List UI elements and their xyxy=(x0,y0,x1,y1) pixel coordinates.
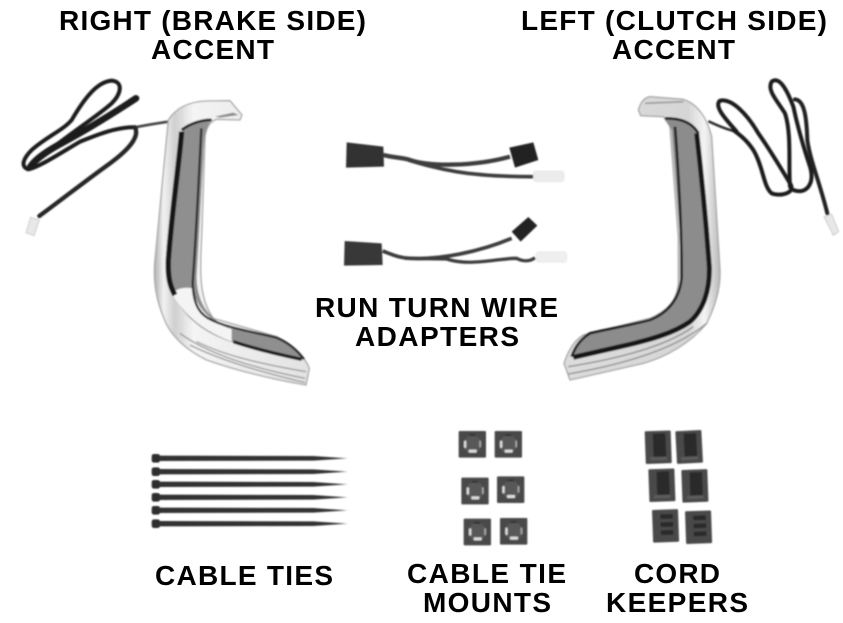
title: right brake side accent: RIGHT (BRAKE SIDE) xyxy=(59,5,366,36)
wire: right accent xyxy=(24,81,168,216)
title: right brake side accent: ACCENT xyxy=(151,34,274,65)
lens dark edge xyxy=(573,133,709,357)
cord keepers xyxy=(645,430,712,544)
chrome body xyxy=(154,101,309,385)
connector: right accent wire xyxy=(26,217,39,236)
caption: run turn wire adapters: RUN TURN WIRE xyxy=(315,292,558,323)
title: left clutch side accent xyxy=(521,5,827,65)
run turn wire adapters xyxy=(344,142,567,266)
cable ties xyxy=(152,454,347,528)
adapter: bottom xyxy=(344,217,567,266)
ribbed lower edge xyxy=(568,323,707,374)
connector: left accent wire xyxy=(824,214,839,235)
caption: cable tie mounts xyxy=(407,558,566,618)
lens panel xyxy=(573,118,711,357)
chrome body xyxy=(564,97,720,380)
right accent with wire xyxy=(24,81,309,385)
wire: left accent xyxy=(709,80,827,213)
title: left clutch side accent: LEFT (CLUTCH SIDE) xyxy=(521,5,827,36)
caption: cable ties: CABLE TIES xyxy=(155,560,333,591)
lens dark edge xyxy=(168,132,182,295)
ribbed lower edge xyxy=(180,333,306,383)
chrome highlight at bend xyxy=(172,288,232,342)
caption: run turn wire adapters xyxy=(315,292,558,352)
title: right brake side accent xyxy=(59,5,366,65)
title: left clutch side accent: ACCENT xyxy=(612,34,735,65)
lens panel xyxy=(166,120,304,359)
caption: cable tie mounts: MOUNTS xyxy=(423,587,551,618)
caption: run turn wire adapters: ADAPTERS xyxy=(355,321,519,352)
caption: cord keepers: CORD xyxy=(634,558,720,589)
left accent with wire xyxy=(564,80,839,380)
caption: cord keepers: KEEPERS xyxy=(606,587,748,618)
caption: cord keepers xyxy=(606,558,748,618)
caption: cable tie mounts: CABLE TIE xyxy=(407,558,566,589)
adapter: top xyxy=(346,142,564,182)
cable tie mounts xyxy=(459,431,527,545)
